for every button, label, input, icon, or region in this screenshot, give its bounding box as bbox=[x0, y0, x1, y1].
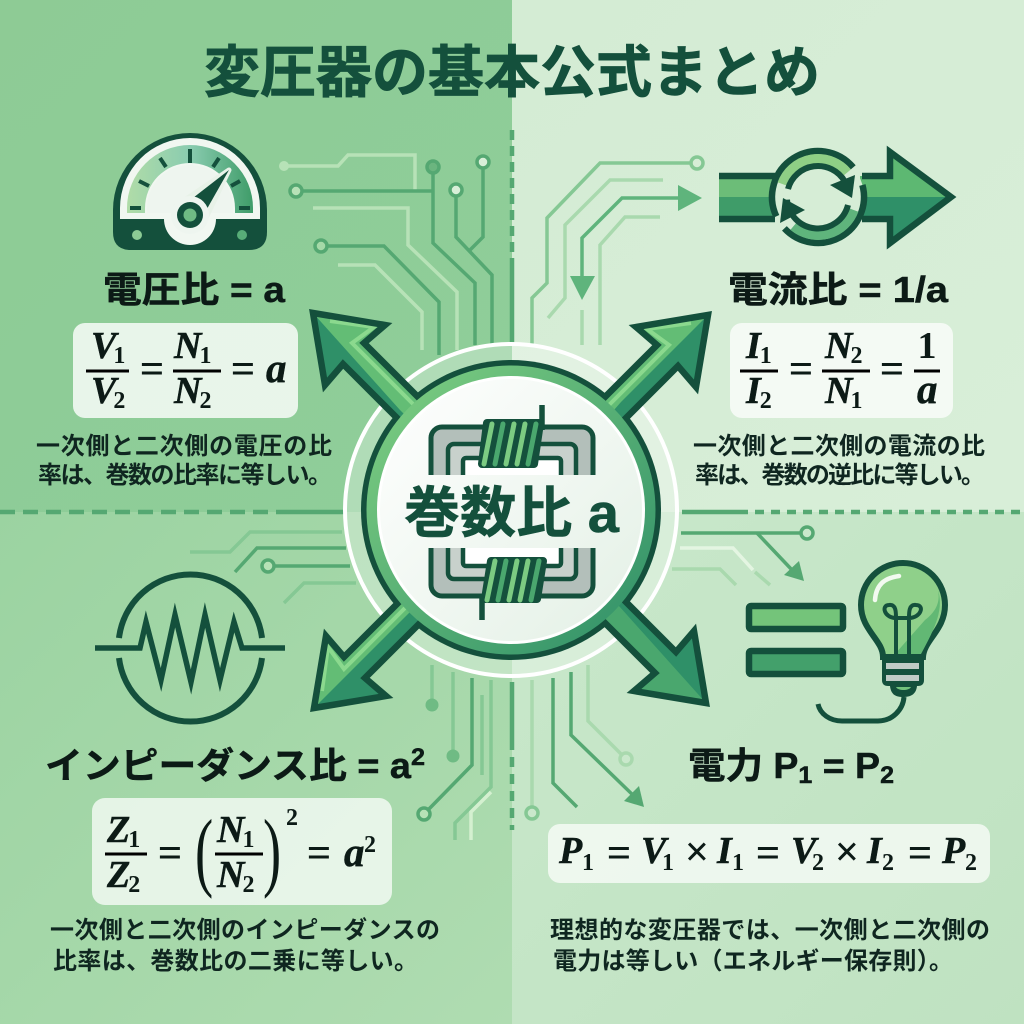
formula box: 1 bbox=[760, 343, 772, 369]
formula box: I bbox=[866, 830, 883, 872]
formula box: V bbox=[641, 830, 669, 872]
icon: light bulb bbox=[818, 563, 945, 721]
description bbox=[50, 916, 440, 975]
formula box: V bbox=[91, 325, 116, 367]
formula box: N bbox=[174, 370, 201, 412]
formula box bbox=[730, 323, 953, 418]
formula box: 2 bbox=[113, 388, 125, 414]
icon: top coil bbox=[482, 405, 542, 464]
heading: 電力 P bbox=[688, 745, 794, 786]
formula box: 2 bbox=[286, 805, 298, 831]
icon: resistor bbox=[95, 574, 285, 722]
icon: equals bars bbox=[749, 606, 843, 674]
description: 率は、巻数の比率に等しい。 bbox=[38, 462, 332, 489]
formula box: N bbox=[825, 370, 852, 412]
formula box: 2 bbox=[242, 872, 254, 898]
formula box: a bbox=[917, 366, 938, 412]
formula box: 2 bbox=[128, 872, 140, 898]
formula box: P bbox=[941, 830, 966, 872]
formula box: 2 bbox=[812, 850, 824, 876]
description: 率は、巻数の逆比に等しい。 bbox=[695, 462, 985, 489]
heading: 2 bbox=[411, 744, 425, 771]
icon: gauge bbox=[113, 133, 267, 250]
formula box: I bbox=[746, 325, 761, 367]
formula box: × bbox=[685, 829, 709, 876]
panel: current ratio bbox=[693, 151, 985, 489]
formula box: Z bbox=[107, 854, 130, 896]
formula box: 1 bbox=[662, 850, 674, 876]
arrow: bottom-left bbox=[314, 521, 501, 708]
formula box: I bbox=[716, 830, 733, 872]
formula box: 1 bbox=[582, 850, 594, 876]
arrow: top-right bbox=[521, 315, 708, 502]
panel: power bbox=[548, 563, 990, 975]
formula box: I bbox=[746, 370, 761, 412]
formula box: 1 bbox=[732, 850, 744, 876]
arrow: bottom-right bbox=[519, 516, 706, 703]
formula box: = bbox=[607, 830, 631, 877]
formula box: 1 bbox=[850, 388, 862, 414]
description bbox=[550, 917, 990, 975]
description: 電力は等しい（エネルギー保存則）。 bbox=[553, 948, 953, 975]
formula box bbox=[92, 798, 392, 905]
panel: impedance ratio bbox=[45, 574, 440, 975]
description: 一次側と二次側の電流の比 bbox=[693, 433, 985, 460]
description: 一次側と二次側のインピーダンスの bbox=[50, 916, 440, 944]
formula box: a bbox=[266, 345, 286, 391]
formula box: N bbox=[174, 325, 201, 367]
formula box: 1 bbox=[918, 325, 936, 367]
formula box: 1 bbox=[128, 827, 140, 853]
formula box: ) bbox=[263, 802, 281, 899]
heading: 2 bbox=[880, 762, 894, 789]
heading: 電流比 = 1/a bbox=[728, 269, 949, 310]
heading: インピーダンス比 = a bbox=[45, 745, 393, 786]
formula box: Z bbox=[107, 809, 130, 851]
formula box: 2 bbox=[850, 343, 862, 369]
formula box: P bbox=[558, 830, 583, 872]
heading: 電圧比 = a bbox=[103, 269, 286, 310]
hub label: 巻数比 a bbox=[404, 482, 619, 544]
formula box: 1 bbox=[242, 827, 254, 853]
formula box: 2 bbox=[199, 388, 211, 414]
formula box: N bbox=[217, 809, 244, 851]
heading: = P bbox=[812, 745, 880, 786]
formula box: 1 bbox=[113, 343, 125, 369]
description: 比率は、巻数比の二乗に等しい。 bbox=[53, 948, 418, 975]
formula box: = bbox=[231, 346, 255, 393]
formula box: 2 bbox=[364, 832, 376, 858]
formula box: = bbox=[158, 830, 182, 877]
formula box: V bbox=[91, 370, 116, 412]
formula box: 2 bbox=[760, 388, 772, 414]
arrow: top-left bbox=[313, 313, 500, 500]
formula box: ( bbox=[195, 802, 213, 899]
formula box: = bbox=[140, 346, 164, 393]
circuit traces bbox=[0, 130, 1024, 840]
formula box: 2 bbox=[882, 850, 894, 876]
formula box: = bbox=[908, 830, 932, 877]
description: 一次側と二次側の電圧の比 bbox=[36, 433, 332, 460]
description: 理想的な変圧器では、一次側と二次側の bbox=[550, 917, 990, 944]
formula box: 1 bbox=[199, 343, 211, 369]
formula box: N bbox=[825, 325, 852, 367]
formula box: N bbox=[217, 854, 244, 896]
formula box: = bbox=[880, 346, 904, 393]
heading: 1 bbox=[798, 762, 812, 789]
formula box: = bbox=[789, 346, 813, 393]
panel: voltage ratio bbox=[36, 133, 332, 489]
formula box: = bbox=[756, 830, 780, 877]
icon: current ratio arrow with cycle bbox=[719, 151, 951, 244]
title: 変圧器の基本公式まとめ bbox=[204, 41, 820, 104]
description bbox=[36, 433, 332, 489]
icon: bottom coil bbox=[482, 561, 543, 620]
formula box: = bbox=[307, 830, 331, 877]
formula box: 2 bbox=[965, 850, 977, 876]
formula box: V bbox=[791, 830, 819, 872]
central hub with arrows bbox=[313, 313, 708, 708]
icon: transformer core bbox=[431, 405, 593, 620]
formula box: a bbox=[344, 829, 364, 875]
formula box bbox=[73, 323, 298, 418]
description bbox=[693, 433, 985, 489]
formula box bbox=[548, 824, 990, 883]
formula box: × bbox=[835, 829, 859, 876]
